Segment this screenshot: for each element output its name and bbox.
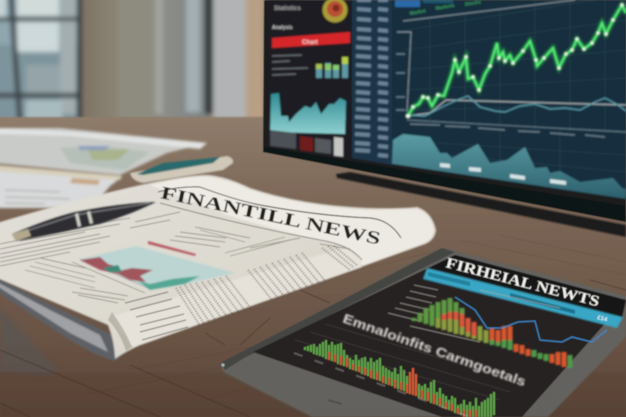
- phone screen: [137, 157, 220, 175]
- wood grain: [0, 280, 626, 417]
- small labels: Analysis: [272, 25, 293, 31]
- panel: main line chart: [392, 0, 626, 190]
- small column text: [125, 292, 188, 340]
- panel: main line chart: Markets: [435, 3, 455, 12]
- newspaper front page: [0, 175, 436, 359]
- green price line: [408, 5, 626, 116]
- tablet title: FIRHEIAL NEWTS: [444, 255, 601, 310]
- tablet subheading: Emnaloinfits Carmgoetals: [341, 312, 528, 389]
- panel: left dashboard: [268, 0, 392, 165]
- monitor screen: [268, 0, 626, 199]
- green glow: [408, 5, 626, 116]
- dashboard heading: Statistics: [274, 6, 301, 12]
- tab labels: Market: [409, 8, 427, 17]
- axes: [397, 0, 575, 112]
- curtain: [82, 0, 207, 120]
- bottom bar chart: [305, 340, 494, 417]
- masthead rules: [158, 187, 401, 238]
- teal trend line: [408, 96, 626, 116]
- background room: window, curtain and wall: [0, 0, 626, 124]
- teal area chart: [392, 134, 626, 199]
- data column rows: [355, 0, 388, 156]
- home button: [328, 400, 342, 404]
- body text lines left: [0, 212, 350, 303]
- monitor: [263, 0, 626, 237]
- monitor bezel: [263, 0, 626, 221]
- stacked papers on the far left: [0, 128, 207, 208]
- wooden table: [0, 117, 626, 417]
- gray trend line: [408, 100, 626, 116]
- newspaper inner pages: [0, 278, 130, 361]
- status tiles: [270, 130, 343, 157]
- blue banner: [423, 268, 623, 328]
- top tabs: [395, 0, 420, 7]
- red banner: [272, 32, 350, 48]
- cyan bar chart: [270, 93, 346, 134]
- bottom chart labels: [294, 353, 470, 417]
- window frame: [77, 0, 82, 122]
- top bar chart: [414, 298, 570, 368]
- newspaper: [0, 175, 436, 361]
- grid: [392, 0, 626, 190]
- bottom roll highlight: [110, 248, 362, 347]
- data points: [406, 3, 624, 118]
- newspaper columns on the roll: [176, 246, 358, 326]
- window panes: [0, 0, 80, 124]
- table reflection: [0, 307, 57, 376]
- tablet screen: [253, 255, 626, 417]
- top chart labels: [388, 285, 560, 342]
- gauge icon: [322, 0, 348, 22]
- red accent bar: [148, 241, 196, 256]
- bottom chart gridlines: [295, 324, 515, 400]
- tablet: [222, 248, 626, 417]
- pen: [12, 202, 156, 241]
- smartphone: [130, 156, 233, 183]
- banner value: £14: [597, 315, 608, 324]
- newspaper infographic: [80, 241, 235, 290]
- masthead headline: FINANTILL NEWS: [159, 182, 382, 248]
- red banner: Chart: [302, 40, 318, 46]
- monitor stand: [336, 172, 626, 237]
- small bar chart: [316, 57, 348, 78]
- tablet body: [222, 248, 626, 417]
- tablet light glint: [222, 364, 224, 366]
- wall: [213, 0, 246, 120]
- blue trend line: [455, 297, 607, 342]
- curved fold highlight: [150, 177, 434, 266]
